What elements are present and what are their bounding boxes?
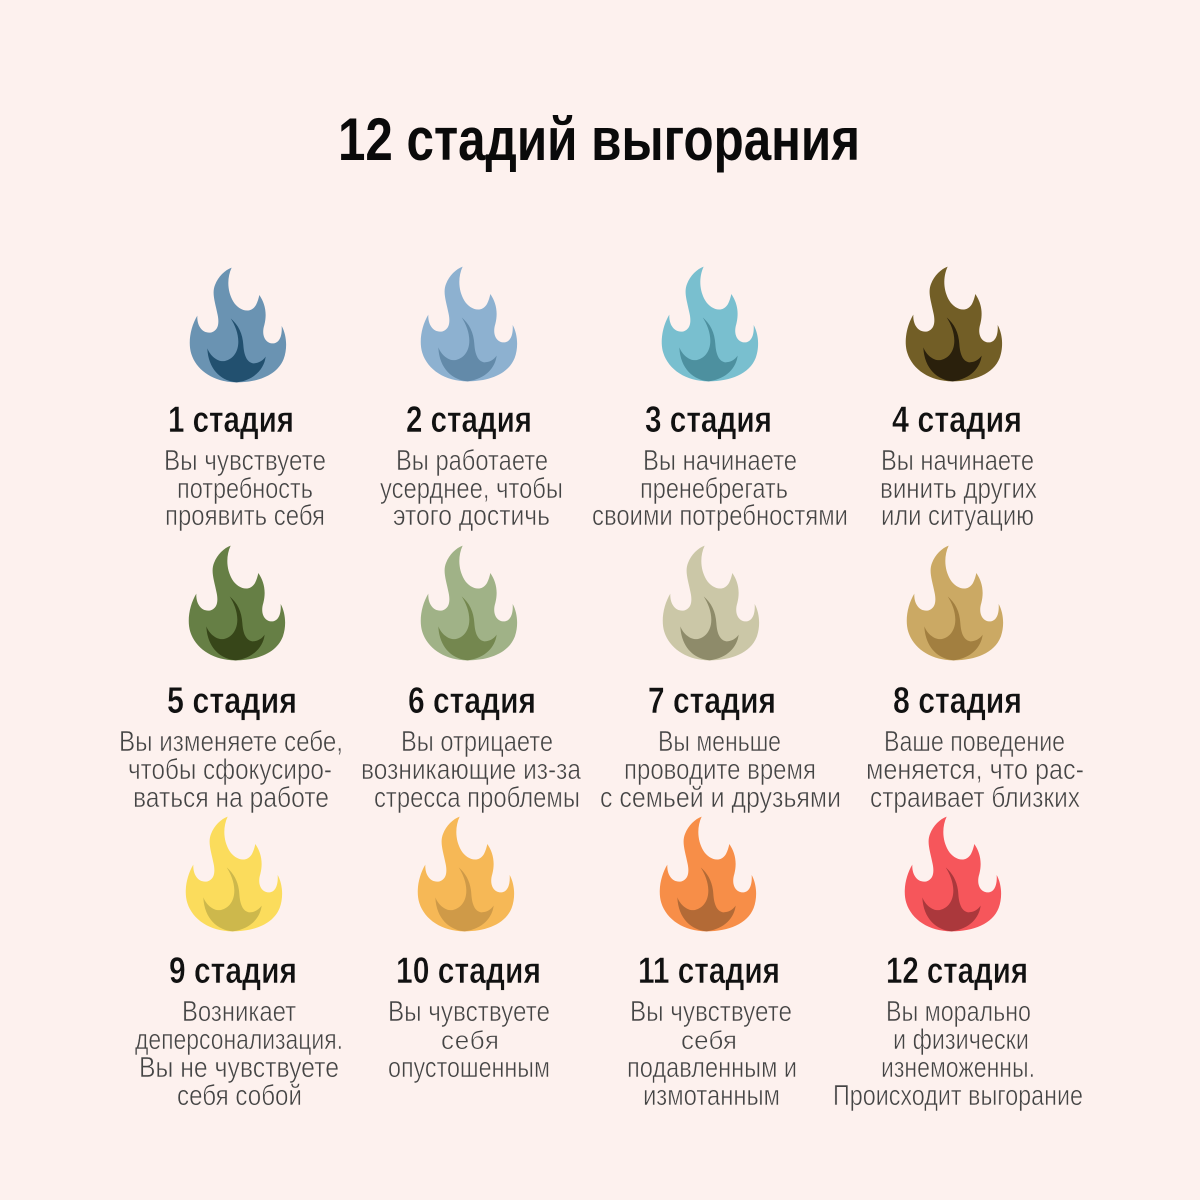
stage 9 bbox=[135, 817, 343, 1112]
icon: flame 5 bbox=[189, 546, 285, 660]
heading: stage 12: 12 стадия bbox=[886, 950, 1028, 991]
icon: flame 7 bbox=[663, 546, 759, 660]
text: stage 9 description: себя собой bbox=[177, 1080, 302, 1112]
text: stage 5 description: чтобы сфокусиро- bbox=[128, 754, 332, 786]
stage 6 bbox=[361, 546, 582, 814]
text: stage 1 description bbox=[164, 445, 326, 532]
icon: flame 11 bbox=[660, 817, 756, 931]
text: stage 8 description: страивает близких bbox=[870, 782, 1080, 814]
text: stage 1 description: потребность bbox=[177, 473, 313, 505]
stage 2 bbox=[380, 267, 563, 532]
text: stage 4 description: или ситуацию bbox=[881, 500, 1034, 532]
text: stage 11 description: Вы чувствуете bbox=[630, 996, 792, 1028]
text: stage 4 description: винить других bbox=[880, 473, 1037, 505]
heading: stage 1: 1 стадия bbox=[168, 399, 294, 440]
text: stage 10 description: Вы чувствуете bbox=[388, 996, 550, 1028]
text: stage 5 description: Вы изменяете себе, bbox=[119, 726, 343, 758]
icon: flame 8 bbox=[907, 546, 1003, 660]
text: stage 7 description: с семьей и друзьями bbox=[600, 782, 841, 814]
text: stage 4 description bbox=[880, 445, 1037, 532]
text: stage 6 description bbox=[361, 726, 582, 814]
text: stage 2 description: Вы работаете bbox=[396, 445, 548, 477]
text: stage 11 description: подавленным и bbox=[627, 1052, 797, 1084]
text: stage 9 description: Вы не чувствуете bbox=[139, 1052, 339, 1084]
stage 12 bbox=[833, 817, 1083, 1112]
stage 1 bbox=[164, 268, 326, 532]
text: stage 8 description: Ваше поведение bbox=[884, 726, 1065, 758]
text: stage 6 description: Вы отрицаете bbox=[401, 726, 553, 758]
stage 10 bbox=[388, 817, 550, 1084]
heading: stage 2: 2 стадия bbox=[406, 399, 532, 440]
text: stage 12 description: Вы морально bbox=[886, 996, 1031, 1028]
text: stage 7 description bbox=[600, 726, 841, 814]
heading: stage 3: 3 стадия bbox=[645, 399, 772, 440]
text: stage 6 description: возникающие из-за bbox=[361, 754, 582, 786]
text: stage 1 description: Вы чувствуете bbox=[164, 445, 326, 477]
stage 3 bbox=[592, 267, 848, 532]
icon: flame 12 bbox=[905, 817, 1001, 931]
text: stage 11 description: себя bbox=[681, 1025, 737, 1055]
heading: stage 5: 5 стадия bbox=[167, 680, 297, 721]
text: stage 4 description: Вы начинаете bbox=[881, 445, 1034, 477]
text: stage 9 description: Возникает bbox=[182, 996, 296, 1028]
icon: flame 2 bbox=[421, 267, 517, 381]
text: stage 2 description: усерднее, чтобы bbox=[380, 473, 563, 505]
heading: stage 8: 8 стадия bbox=[893, 680, 1022, 721]
icon: flame 9 bbox=[186, 817, 282, 931]
text: stage 3 description bbox=[592, 445, 848, 532]
stage 11 bbox=[627, 817, 797, 1112]
text: stage 3 description: Вы начинаете bbox=[643, 445, 797, 477]
text: stage 10 description: опустошенным bbox=[388, 1052, 550, 1084]
text: stage 12 description: изнеможенны. bbox=[881, 1052, 1035, 1084]
stage 4 bbox=[880, 267, 1037, 532]
icon: flame 4 bbox=[906, 267, 1002, 381]
stage 7 bbox=[600, 546, 841, 814]
text: stage 11 description bbox=[627, 996, 797, 1112]
text: stage 12 description: и физически bbox=[893, 1024, 1029, 1056]
text: stage 1 description: проявить себя bbox=[165, 500, 325, 532]
text: stage 7 description: проводите время bbox=[624, 754, 816, 786]
heading: stage 11: 11 стадия bbox=[638, 950, 780, 991]
stage 5 bbox=[119, 546, 343, 814]
text: stage 2 description bbox=[380, 445, 563, 532]
icon: flame 10 bbox=[418, 817, 514, 931]
heading: stage 9: 9 стадия bbox=[169, 950, 297, 991]
icon: flame 3 bbox=[662, 267, 758, 381]
icon: flame 1 bbox=[190, 268, 286, 382]
heading: stage 4: 4 стадия bbox=[892, 399, 1022, 440]
heading: stage 7: 7 стадия bbox=[648, 680, 776, 721]
text: stage 3 description: своими потребностями bbox=[592, 500, 848, 532]
text: stage 8 description: меняется, что рас- bbox=[866, 754, 1084, 786]
heading: stage 6: 6 стадия bbox=[408, 680, 536, 721]
text: stage 6 description: стресса проблемы bbox=[374, 782, 580, 814]
text: stage 5 description bbox=[119, 726, 343, 814]
text: stage 7 description: Вы меньше bbox=[658, 726, 781, 758]
heading: stage 10: 10 стадия bbox=[396, 950, 541, 991]
text: stage 5 description: ваться на работе bbox=[133, 782, 329, 814]
text: stage 11 description: измотанным bbox=[643, 1080, 780, 1112]
text: stage 3 description: пренебрегать bbox=[640, 473, 788, 505]
icon: flame 6 bbox=[421, 546, 517, 660]
stage 8 bbox=[866, 546, 1084, 814]
text: stage 2 description: этого достичь bbox=[393, 500, 550, 532]
text: stage 12 description bbox=[833, 996, 1083, 1112]
text: stage 9 description bbox=[135, 996, 343, 1112]
text: stage 12 description: Происходит выгорание bbox=[833, 1080, 1083, 1112]
text: stage 8 description bbox=[866, 726, 1084, 814]
text: stage 10 description bbox=[388, 996, 550, 1084]
title: 12 стадий выгорания bbox=[338, 106, 860, 173]
text: stage 9 description: деперсонализация. bbox=[135, 1024, 343, 1056]
text: stage 10 description: себя bbox=[441, 1025, 499, 1055]
